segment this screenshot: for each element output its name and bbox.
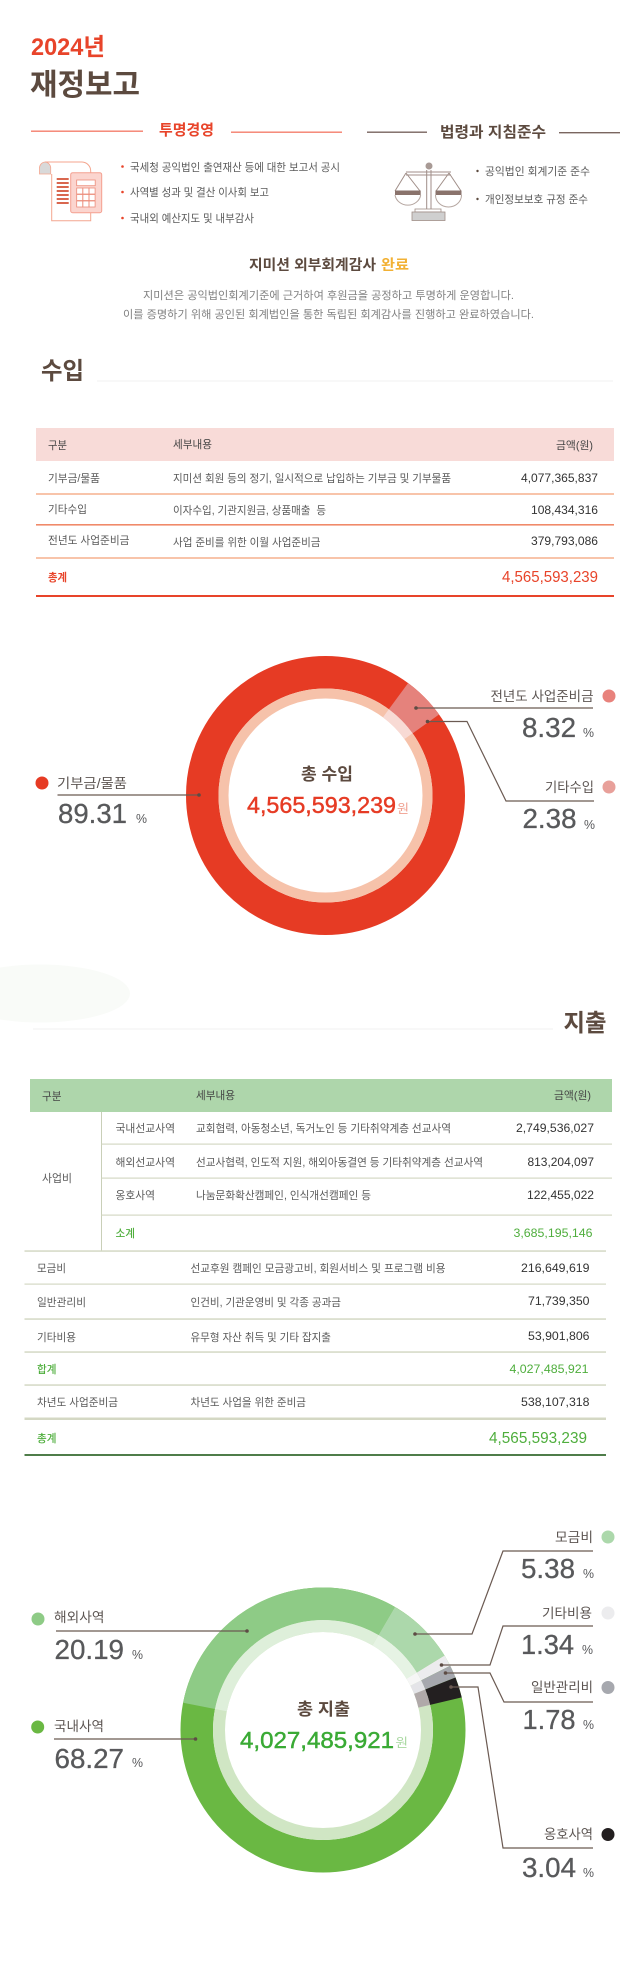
row: prior year reserve: 사업 준비를 위한 이월 사업준비금 — [173, 536, 321, 549]
row: total: 4,565,593,239 — [489, 1430, 587, 1447]
bullet list: 국내외 예산지도 및 내부감사 — [130, 212, 254, 225]
section heading: income: 수입 — [41, 358, 84, 385]
row: prior year reserve: 379,793,086 — [531, 534, 598, 548]
income donut centre label: 총 수입 — [301, 765, 353, 784]
row: domestic ministry: 교회협력, 아동청소년, 독거노인 등 기타취약계층 선교사역 — [196, 1122, 451, 1135]
section heading: expenses: 지출 — [564, 1010, 606, 1037]
callout: prior year reserve: % — [583, 725, 594, 740]
row: overseas ministry: 해외선교사역 — [116, 1156, 175, 1169]
callout: advocacy: 3.04 — [522, 1852, 576, 1883]
row: advocacy — [116, 1188, 594, 1202]
callout: other costs: 1.34 — [521, 1629, 574, 1660]
callout: prior year reserve: 8.32 — [522, 712, 576, 743]
row: other costs — [37, 1329, 590, 1344]
row: overseas ministry — [116, 1155, 594, 1169]
bullet list: 공익법인 회계기준 준수 — [485, 166, 590, 178]
callout: general admin — [444, 1671, 614, 1735]
icon: document with calculator — [39, 162, 102, 221]
audit status: 완료 — [381, 257, 409, 274]
callout: domestic ministry: % — [132, 1755, 143, 1770]
income donut centre label: 원 — [397, 802, 409, 816]
callout: other income: 2.38 — [522, 803, 576, 834]
row: next year reserve: 차년도 사업준비금 — [37, 1396, 118, 1409]
table header: 세부내용 — [196, 1090, 235, 1102]
row: domestic ministry — [116, 1121, 594, 1135]
row: sum — [37, 1362, 589, 1376]
row: fundraising: 선교후원 캠페인 모금광고비, 회원서비스 및 프로그램 비용 — [190, 1263, 446, 1275]
row: subtotal — [116, 1226, 593, 1240]
row: total: 4,565,593,239 — [502, 569, 598, 586]
row: total: 총계 — [37, 1432, 56, 1445]
row: overseas ministry: 813,204,097 — [528, 1155, 594, 1169]
expense donut chart — [149, 1556, 497, 1904]
row: prior year reserve — [48, 534, 598, 549]
audit heading: 지미션 외부회계감사 — [249, 257, 377, 274]
row: other costs: 53,901,806 — [528, 1329, 590, 1343]
row: total — [37, 1430, 587, 1447]
table header: 금액(원) — [556, 440, 593, 452]
row: donations: 기부금/물품 — [48, 473, 100, 485]
row: other income: 기타수입 — [48, 503, 87, 516]
callout: other income: % — [584, 817, 595, 832]
callout: domestic ministry — [31, 1719, 197, 1774]
income donut centre label — [247, 765, 409, 818]
audit description: 이를 증명하기 위해 공인된 회계법인을 통한 독립된 회계감사를 진행하고 완료하였습니다. — [123, 307, 534, 321]
income donut centre label: 4,565,593,239 — [247, 792, 396, 818]
callout: advocacy — [449, 1685, 614, 1883]
row: donations — [48, 471, 598, 485]
callout: other costs: 기타비용 — [542, 1606, 592, 1621]
callout: general admin: % — [583, 1717, 594, 1732]
row: general admin: 인건비, 기관운영비 및 각종 공과금 — [190, 1297, 341, 1309]
callout: general admin: 일반관리비 — [531, 1680, 593, 1695]
row: prior year reserve: 전년도 사업준비금 — [48, 534, 130, 547]
row: next year reserve: 차년도 사업을 위한 준비금 — [190, 1396, 306, 1409]
row: next year reserve: 538,107,318 — [521, 1395, 590, 1409]
row: general admin — [37, 1294, 590, 1309]
expense donut centre label: 총 지출 — [297, 1700, 350, 1719]
table header: 구분 — [48, 440, 67, 452]
row: other costs: 기타비용 — [37, 1332, 76, 1344]
bullet list: 국세청 공익법인 출연재산 등에 대한 보고서 공시 — [130, 162, 340, 174]
callout: donations: 기부금/물품 — [57, 776, 127, 791]
bullet list: 사역별 성과 및 결산 이사회 보고 — [130, 187, 269, 199]
table header: 구분 — [42, 1091, 62, 1103]
row: next year reserve — [37, 1395, 590, 1409]
row: domestic ministry: 국내선교사역 — [116, 1123, 175, 1135]
callout: donations — [36, 776, 201, 829]
row: total — [48, 569, 598, 586]
row: other income: 이자수입, 기관지원금, 상품매출 등 — [173, 504, 326, 517]
icon: balance scale — [395, 162, 462, 220]
row: fundraising — [37, 1261, 590, 1275]
row: total: 총계 — [48, 571, 67, 584]
bullet list — [476, 166, 590, 206]
callout: other income: 기타수입 — [545, 780, 594, 795]
callout: fundraising: 모금비 — [555, 1530, 593, 1545]
callout: general admin: 1.78 — [522, 1704, 576, 1735]
row: sum: 4,027,485,921 — [510, 1362, 589, 1376]
row: subtotal: 3,685,195,146 — [514, 1226, 593, 1240]
row: advocacy: 나눔문화확산캠페인, 인식개선캠페인 등 — [196, 1189, 371, 1202]
expense donut centre label — [240, 1700, 408, 1753]
row: fundraising: 모금비 — [37, 1263, 66, 1275]
callout: donations: % — [136, 811, 147, 826]
row: other costs: 유무형 자산 취득 및 기타 잡지출 — [190, 1332, 331, 1344]
panel: transparent management — [31, 122, 342, 225]
row: other income — [48, 503, 598, 517]
income donut chart — [153, 623, 498, 968]
callout: prior year reserve — [414, 689, 616, 743]
panel: legal compliance — [367, 124, 620, 220]
bullet list: 개인정보보호 규정 준수 — [485, 194, 588, 206]
expense table — [24, 1079, 612, 1456]
table header — [30, 1079, 612, 1112]
main title: 재정보고 — [30, 69, 140, 102]
callout: other income — [426, 720, 616, 834]
callout: overseas ministry — [32, 1610, 249, 1665]
expense donut centre label: 4,027,485,921 — [240, 1727, 394, 1753]
row: general admin: 일반관리비 — [37, 1296, 86, 1309]
callout: advocacy: 옹호사역 — [544, 1827, 593, 1842]
row: subtotal: 소계 — [116, 1227, 135, 1240]
heading: transparent management: 투명경영 — [159, 122, 214, 139]
heading: legal compliance: 법령과 지침준수 — [440, 124, 546, 141]
row: advocacy: 옹호사역 — [116, 1190, 155, 1202]
callout: donations: 89.31 — [58, 798, 127, 829]
audit statement — [123, 257, 534, 321]
callout: other costs — [440, 1606, 614, 1667]
row group label: program costs: 사업비 — [42, 1172, 72, 1185]
row: sum: 합계 — [37, 1363, 56, 1376]
row: advocacy: 122,455,022 — [527, 1188, 594, 1202]
year heading: 2024년 — [31, 34, 105, 61]
row: domestic ministry: 2,749,536,027 — [516, 1121, 594, 1135]
callout: overseas ministry: % — [132, 1647, 143, 1662]
title block — [30, 34, 140, 102]
callout: overseas ministry: 해외사역 — [54, 1610, 104, 1625]
audit description: 지미션은 공익법인회계기준에 근거하여 후원금을 공정하고 투명하게 운영합니다. — [143, 288, 514, 302]
row: other income: 108,434,316 — [531, 503, 598, 517]
callout: domestic ministry: 68.27 — [54, 1743, 124, 1774]
row: donations: 4,077,365,837 — [521, 471, 598, 485]
callout: advocacy: % — [583, 1865, 594, 1880]
table header: 세부내용 — [173, 439, 212, 451]
callout: fundraising: % — [583, 1566, 594, 1581]
expense donut centre label: 원 — [396, 1736, 408, 1750]
callout: fundraising: 5.38 — [521, 1553, 575, 1584]
bullet list — [121, 162, 340, 225]
audit description — [123, 288, 534, 321]
income table — [36, 428, 614, 597]
callout: domestic ministry: 국내사역 — [54, 1719, 104, 1734]
callout: prior year reserve: 전년도 사업준비금 — [490, 689, 594, 704]
row: overseas ministry: 선교사협력, 인도적 지원, 해외아동결연 등 기타취약계층 선교사역 — [196, 1156, 483, 1169]
callout: overseas ministry: 20.19 — [54, 1634, 124, 1665]
row: donations: 지미션 회원 등의 정기, 일시적으로 납입하는 기부금 및 기부물품 — [173, 472, 451, 485]
table header — [36, 428, 614, 461]
callout: fundraising — [413, 1530, 614, 1636]
row: fundraising: 216,649,619 — [521, 1261, 590, 1275]
row: general admin: 71,739,350 — [528, 1294, 590, 1308]
table header: 금액(원) — [554, 1090, 591, 1102]
callout: other costs: % — [582, 1642, 593, 1657]
